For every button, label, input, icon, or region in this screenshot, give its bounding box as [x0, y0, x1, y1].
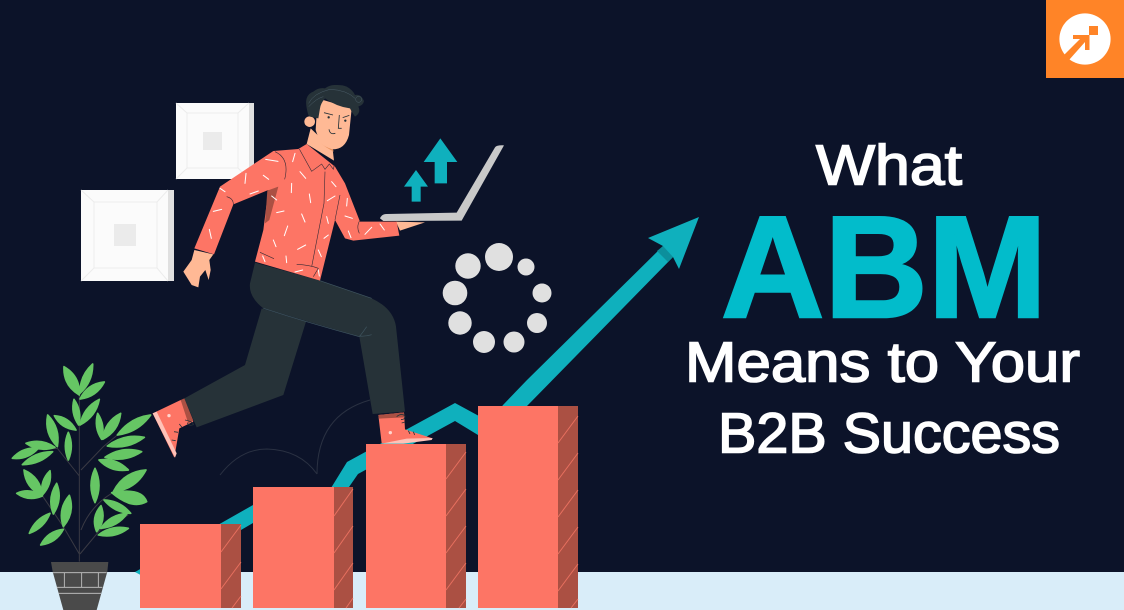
bar 4	[478, 406, 578, 608]
shirt	[194, 144, 399, 281]
white box top	[176, 103, 254, 179]
person running with laptop	[153, 85, 504, 458]
title line: Means to Your: Means to Your	[685, 330, 1080, 394]
loading spinner dots	[443, 243, 552, 353]
front leg	[250, 263, 405, 414]
title	[685, 134, 1080, 466]
small up arrow	[404, 170, 428, 202]
plant stems	[27, 395, 128, 562]
left hand	[183, 250, 213, 287]
bar 3	[366, 444, 466, 608]
floor band	[0, 572, 1124, 610]
potted plant	[12, 364, 151, 610]
head	[304, 85, 364, 161]
back shoe	[153, 398, 193, 458]
title line: B2B Success: B2B Success	[718, 402, 1060, 466]
large up arrow	[424, 138, 457, 183]
logo badge	[1046, 0, 1124, 78]
bar 2	[253, 487, 353, 608]
white box bottom	[81, 190, 174, 281]
bar 1	[140, 524, 241, 608]
laptop hand	[396, 222, 425, 231]
laptop	[380, 145, 504, 221]
title line: What: What	[816, 134, 962, 198]
growth arrow	[135, 217, 699, 580]
step arcs	[220, 400, 370, 475]
back leg	[184, 308, 306, 427]
front shoe	[378, 412, 433, 444]
plant leaves	[12, 364, 151, 545]
title line: ABM: ABM	[721, 186, 1047, 348]
plant pot	[51, 562, 108, 610]
